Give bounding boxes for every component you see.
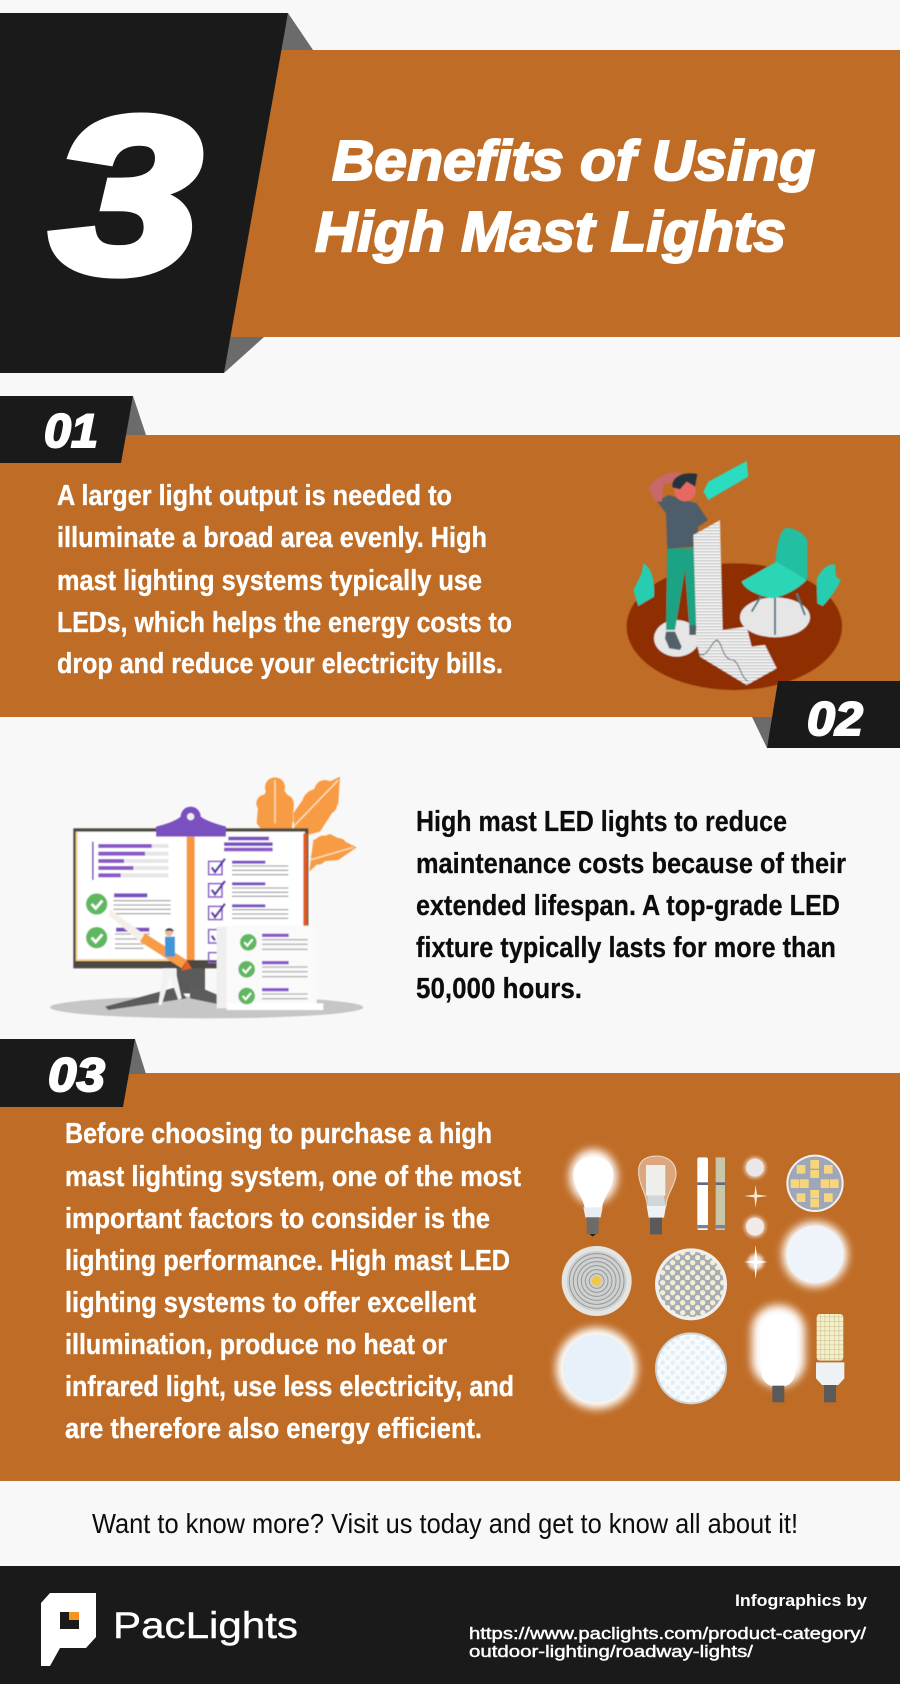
icon: small discs and sparkles xyxy=(744,1157,768,1279)
tag 01 xyxy=(0,396,133,463)
icon: glowing round panel xyxy=(556,1328,637,1409)
icon: clear LED bulb xyxy=(639,1156,676,1234)
icon: tall glowing bulb xyxy=(752,1305,805,1402)
tag 03: 03 xyxy=(48,1048,105,1101)
panel 3 text: are therefore also energy efficient. xyxy=(65,1413,482,1445)
panel 2 text: High mast LED lights to reduce xyxy=(416,806,787,838)
tag 02: 02 xyxy=(807,692,863,745)
panel 3 text: lighting systems to offer excellent xyxy=(65,1287,476,1319)
illustration: man reading long bill beside chair xyxy=(627,461,842,690)
icon: corn LED bulb xyxy=(816,1314,844,1402)
header top fold xyxy=(280,13,313,50)
source URL: https://www.paclights.com/product-category/ xyxy=(469,1624,866,1643)
credit line: Infographics by xyxy=(735,1591,868,1610)
panel: benefit 03 xyxy=(0,1039,900,1481)
header orange ribbon xyxy=(228,50,900,337)
panel 3 text: illumination, produce no heat or xyxy=(65,1329,447,1361)
header bottom fold xyxy=(224,337,264,373)
panel 2 text: fixture typically lasts for more than xyxy=(416,932,836,964)
icon: ringed silver disc xyxy=(562,1246,632,1316)
tag 01 fold xyxy=(125,396,146,435)
logo wordmark: PacLights xyxy=(113,1605,298,1646)
illustration: monitor checklist with leaves and pencil xyxy=(50,777,363,1018)
icon: multi LED disc xyxy=(655,1248,727,1320)
title: Benefits of Using xyxy=(332,129,815,193)
panel 2 text: 50,000 hours. xyxy=(416,973,582,1005)
tag 02 fold xyxy=(752,717,778,748)
illustration: LED bulbs collection xyxy=(556,1149,848,1409)
footer bar xyxy=(0,1566,900,1684)
header black block xyxy=(0,13,288,373)
logo mark xyxy=(41,1593,96,1666)
icon: glowing disc top right xyxy=(782,1222,848,1287)
icon: SMD LED disc xyxy=(786,1155,844,1212)
panel: benefit 01 xyxy=(0,396,900,717)
panel 1 background xyxy=(0,435,900,717)
tag 01: 01 xyxy=(44,404,98,457)
panel 3 text: mast lighting system, one of the most xyxy=(65,1161,521,1193)
icon: LED tubes xyxy=(697,1157,725,1230)
panel 1 text xyxy=(57,480,512,680)
panel 3 text: Before choosing to purchase a high xyxy=(65,1118,492,1150)
call to action text: Want to know more? Visit us today and get to know all about it! xyxy=(92,1508,798,1539)
title xyxy=(315,129,815,264)
header banner xyxy=(0,13,900,373)
panel 3 text: infrared light, use less electricity, and xyxy=(65,1371,514,1403)
panel 3 text: lighting performance. High mast LED xyxy=(65,1245,510,1277)
panel 1 text: LEDs, which helps the energy costs to xyxy=(57,607,512,639)
panel: benefit 02 xyxy=(50,777,846,1018)
tag 03 fold xyxy=(128,1039,146,1074)
title: High Mast Lights xyxy=(315,200,786,264)
panel 1 text: drop and reduce your electricity bills. xyxy=(57,648,503,680)
source URL: outdoor-lighting/roadway-lights/ xyxy=(469,1642,753,1661)
panel 1 text: illuminate a broad area evenly. High xyxy=(57,522,487,554)
tag 03 xyxy=(0,1039,135,1107)
big number 3: 3 xyxy=(51,72,201,320)
icon: white multi LED disc xyxy=(655,1332,727,1404)
tag 02 xyxy=(767,681,900,748)
panel 3 background xyxy=(0,1073,900,1481)
panel 2 text: maintenance costs because of their xyxy=(416,848,846,880)
panel 2 text xyxy=(416,806,846,1005)
icon: glowing bulb xyxy=(569,1149,617,1237)
panel 1 text: mast lighting systems typically use xyxy=(57,565,482,597)
source URL xyxy=(469,1624,866,1661)
panel 2 text: extended lifespan. A top-grade LED xyxy=(416,890,840,922)
panel 1 text: A larger light output is needed to xyxy=(57,480,452,512)
panel 3 text: important factors to consider is the xyxy=(65,1203,490,1235)
panel 3 text xyxy=(65,1118,521,1445)
